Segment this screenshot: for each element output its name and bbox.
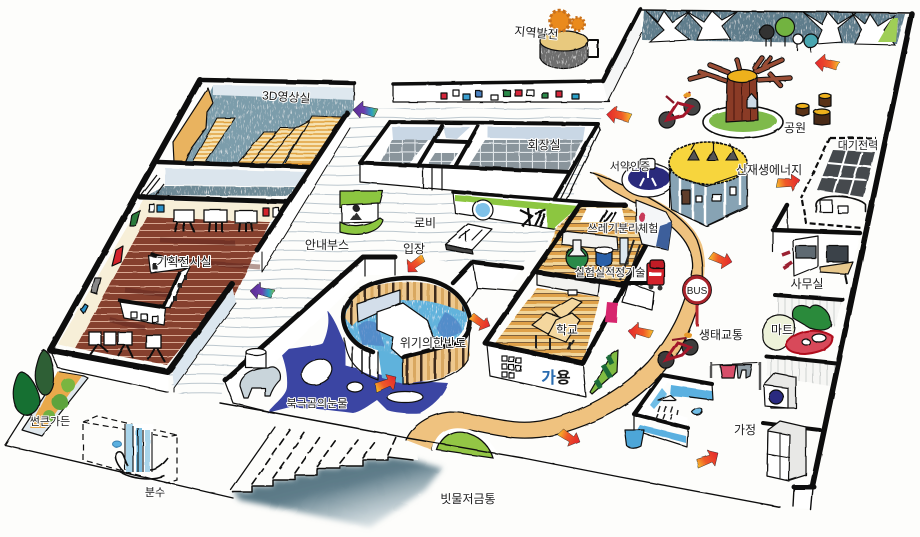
3D theater room	[158, 80, 354, 167]
exhibition and theater outer walls	[50, 80, 350, 392]
road path	[406, 172, 705, 450]
meeting room	[360, 122, 600, 200]
school entrance side wall	[453, 262, 522, 310]
label: home: 가정	[734, 423, 756, 437]
label: meeting room: 회장실	[527, 138, 561, 152]
label: information booth: 안내부스	[305, 238, 349, 252]
label: school sign: 가용	[541, 369, 571, 387]
laundry line	[711, 362, 760, 390]
school classroom	[485, 205, 654, 397]
polar bear meltwater pool	[267, 310, 448, 413]
exhibition display counter	[118, 254, 190, 325]
label: special exhibition: 기획전시실	[156, 255, 212, 269]
label: office: 사무실	[790, 277, 824, 291]
label: school: 학교	[556, 323, 578, 337]
label: pledge: 서약인증	[610, 159, 650, 173]
green roundabout	[432, 428, 500, 460]
regional power generator	[540, 11, 598, 68]
office	[773, 205, 860, 284]
exhibition room floor	[58, 197, 292, 365]
crisis korean peninsula round room	[343, 278, 470, 384]
label: eco transport: 생태교통	[699, 328, 743, 342]
renewable energy pavilion	[669, 142, 748, 226]
sunken garden	[5, 350, 88, 445]
home refrigerator	[763, 421, 820, 481]
waste sorting room	[537, 205, 645, 285]
lobby divider wall	[225, 257, 395, 412]
label: entrance: 입장	[403, 242, 425, 256]
label: lobby: 로비	[414, 216, 436, 230]
label: polar bear tears: 북극곰의눈물	[287, 397, 347, 410]
label: fountain: 분수	[145, 486, 165, 499]
standby power solar array	[801, 138, 876, 228]
label: sunken garden: 썬큰가든	[30, 415, 70, 428]
rainbow direction arrows	[250, 101, 378, 299]
lobby desk	[445, 224, 492, 254]
label: standby power: 대기전력	[838, 139, 878, 152]
green activity room panel	[453, 192, 625, 229]
east boundary wall	[793, 14, 912, 510]
fire direction arrows	[371, 54, 840, 475]
label: mart: 마트	[771, 323, 793, 337]
home washing machine	[764, 356, 836, 408]
park tree	[690, 58, 790, 138]
label: korean peninsula in crisis: 위기의한반도	[400, 336, 466, 350]
rainwater tank staircase	[226, 427, 442, 527]
bus stop sign	[682, 276, 712, 326]
small trees	[760, 18, 818, 52]
fountain	[83, 416, 177, 483]
stump seats	[796, 93, 831, 125]
corridor between rooms	[140, 168, 308, 197]
north wall with display frames	[393, 81, 610, 103]
ground boundary lines	[5, 403, 780, 507]
park wall and tree mural	[602, 9, 912, 102]
polar bear	[240, 348, 280, 398]
label: regional power: 지역발전	[514, 24, 559, 42]
label: appropriate technology lab: 실험실적정기술	[575, 266, 645, 279]
label: renewable energy: 신재생에너지	[736, 163, 802, 177]
mart produce	[763, 295, 843, 354]
bicycle in park	[659, 92, 700, 128]
water saving shower area	[625, 375, 713, 448]
easels and panels	[81, 204, 279, 362]
bicycle on road	[658, 332, 698, 368]
label: waste sorting: 쓰레기분리체험	[588, 222, 658, 235]
label: park: 공원	[784, 121, 806, 135]
lobby floor	[168, 108, 605, 402]
pledge certification dais	[622, 159, 674, 197]
bus stop sign: BUS	[687, 286, 708, 297]
info booth	[340, 191, 383, 234]
label: 3D theater: 3D영상실	[262, 88, 311, 106]
fire truck	[647, 260, 664, 290]
label: rainwater tank: 빗물저금통	[440, 492, 496, 506]
recycling display box	[636, 200, 672, 250]
